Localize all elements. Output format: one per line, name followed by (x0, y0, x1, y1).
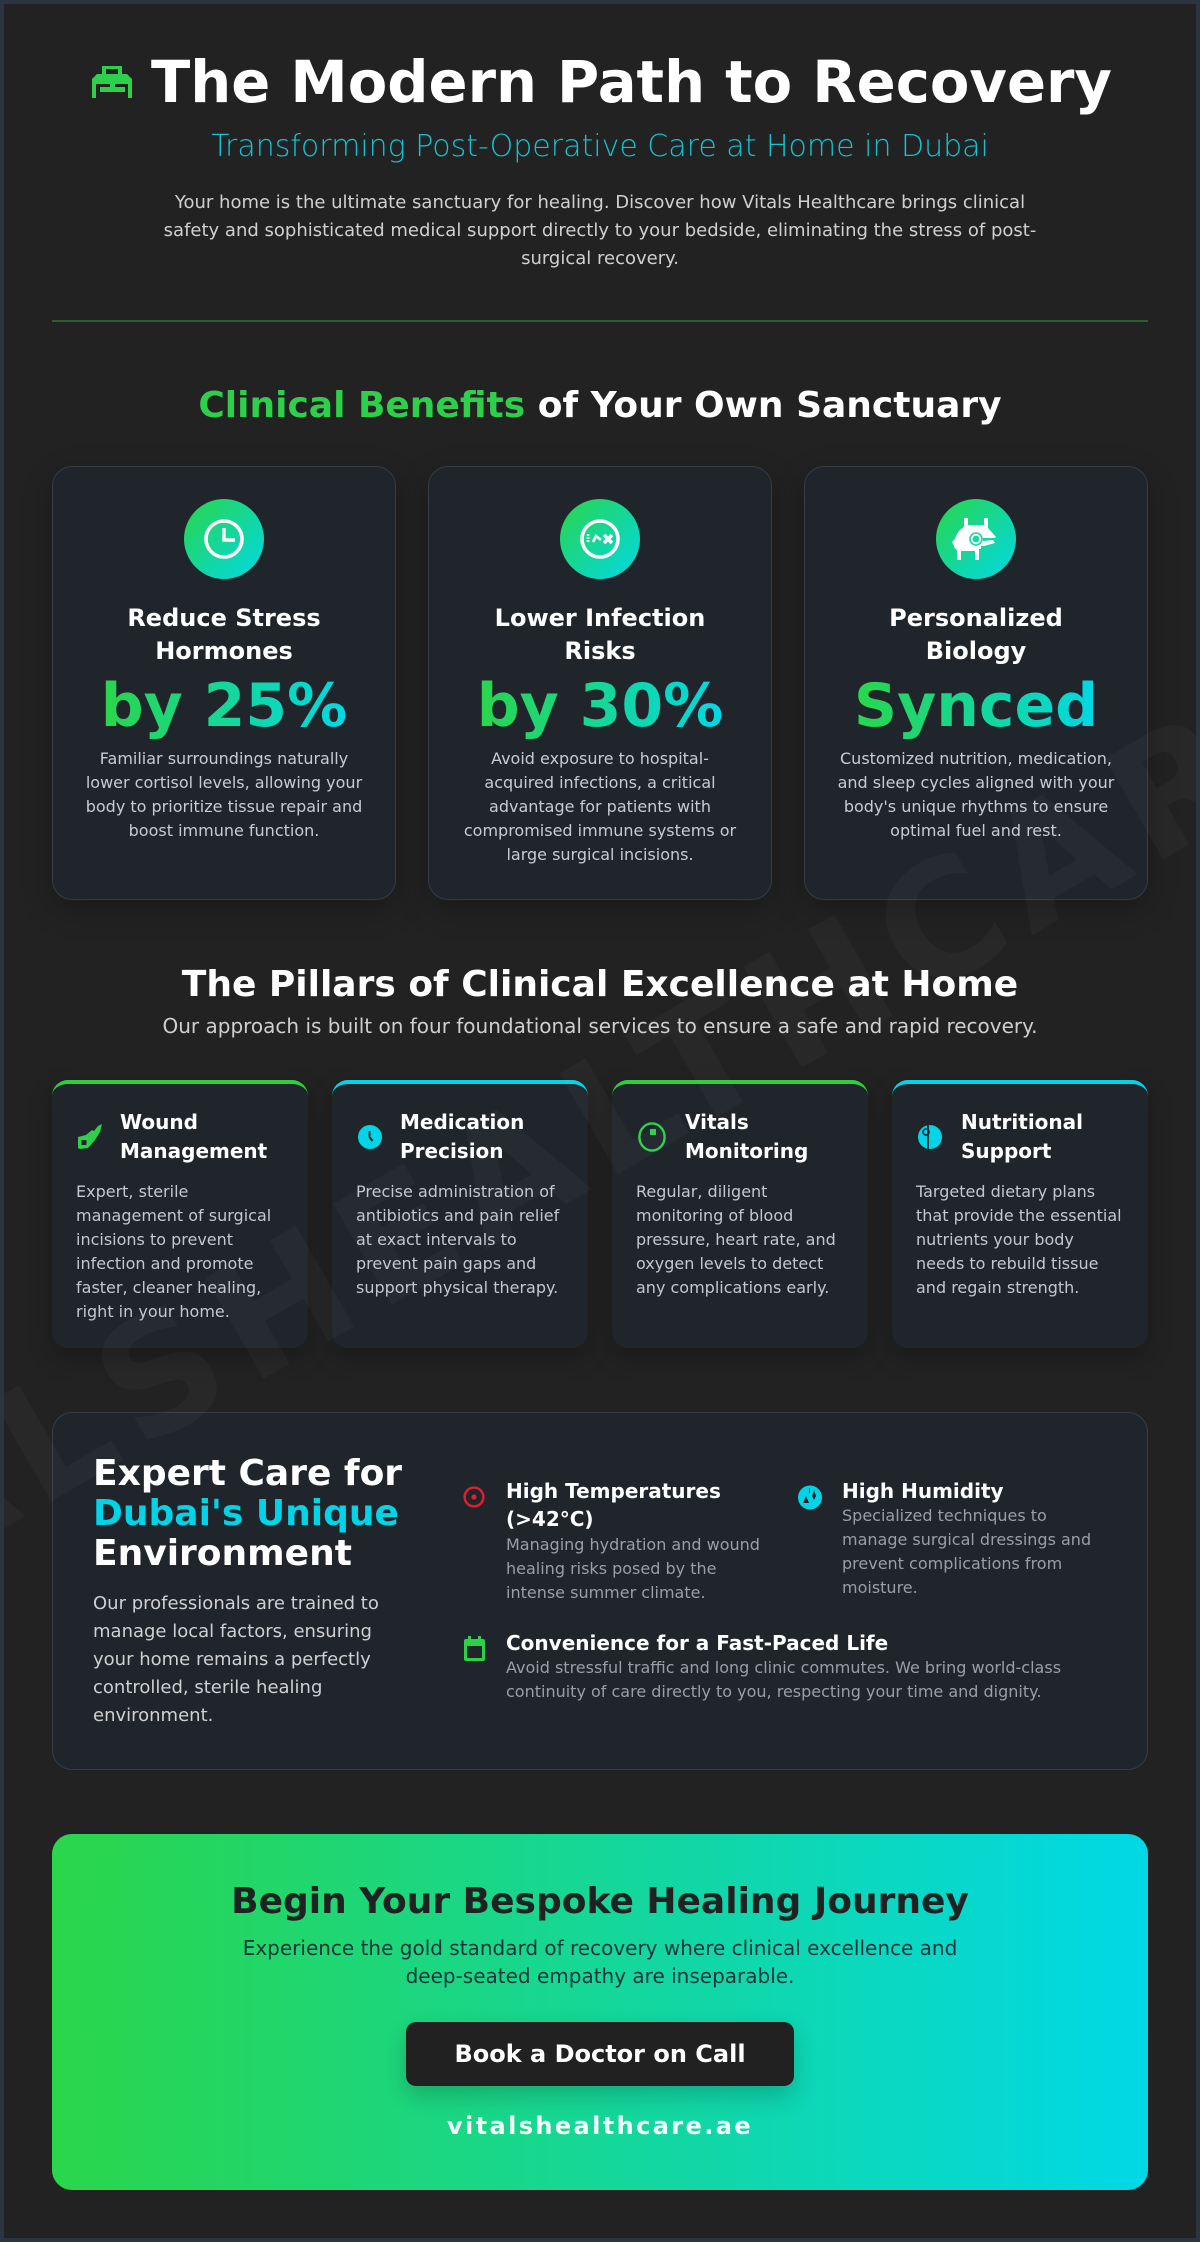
pillar text: faster, cleaner healing, (76, 1278, 261, 1297)
environment paragraph: Our professionals are trained to (93, 1593, 379, 1614)
panel: call to action (52, 1834, 1148, 2190)
pillar text: antibiotics and pain relief (356, 1206, 559, 1225)
item: high humidity (842, 1479, 1091, 1597)
card title (127, 604, 321, 665)
pillar text: Precise administration of (356, 1182, 555, 1201)
card text: Avoid exposure to hospital- (491, 749, 709, 768)
button (406, 2022, 794, 2086)
card text: body's unique rhythms to ensure (844, 797, 1108, 816)
call to action text: deep-seated empathy are inseparable. (406, 1964, 794, 1988)
card text: lower cortisol levels, allowing your (86, 773, 362, 792)
pillar title: Monitoring (685, 1138, 808, 1162)
pillar title (120, 1110, 267, 1162)
pillar text: Regular, diligent (636, 1182, 767, 1201)
item: high temperatures: (>42°C) (506, 1507, 594, 1531)
card text (838, 749, 1114, 840)
call to action text (243, 1936, 957, 1988)
stat: by 30% (477, 671, 723, 741)
pillar text: right in your home. (76, 1302, 230, 1321)
pillar text: nutrients your body (916, 1230, 1074, 1249)
pillar text: at exact intervals to (356, 1230, 517, 1249)
pillar text: and regain strength. (916, 1278, 1079, 1297)
item: high temperatures: intense summer climate. (506, 1583, 706, 1602)
pillar title: Precision (400, 1138, 504, 1162)
environment paragraph: controlled, sterile healing (93, 1677, 322, 1698)
intro paragraph: surgical recovery. (521, 248, 679, 269)
pillar text (76, 1182, 271, 1321)
card text: Familiar surroundings naturally (100, 749, 348, 768)
item: high temperatures: Managing hydration and wound (506, 1535, 760, 1554)
item: high humidity: Specialized techniques to (842, 1506, 1047, 1525)
pillar text: Expert, sterile (76, 1182, 188, 1201)
environment paragraph: your home remains a perfectly (93, 1649, 371, 1670)
pillar text: management of surgical (76, 1206, 271, 1225)
pillar text: Targeted dietary plans (916, 1182, 1095, 1201)
card title: Reduce Stress (127, 604, 321, 632)
pillar text: prevent pain gaps and (356, 1254, 536, 1273)
heading: pillars: The Pillars of Clinical Excellence at Home (182, 964, 1018, 1005)
pillar title: Management (120, 1138, 267, 1162)
heading: healing journey: Begin Your Bespoke Healing Journey (231, 1881, 969, 1922)
pillar text (636, 1182, 836, 1297)
pillar text: oxygen levels to detect (636, 1254, 823, 1273)
item: high temperatures: High Temperatures (506, 1479, 721, 1503)
icon: bandage (78, 1124, 102, 1149)
pillar text (916, 1182, 1122, 1297)
panel: wound management (52, 1080, 308, 1348)
heading: expert care: Dubai's Unique (93, 1493, 399, 1534)
pillar text: infection and promote (76, 1254, 253, 1273)
pillar title: Medication (400, 1110, 524, 1134)
item: high humidity: moisture. (842, 1578, 918, 1597)
intro paragraph: safety and sophisticated medical support directly to your bedside, eliminating the stress of post- (164, 220, 1036, 241)
intro paragraph (164, 192, 1036, 269)
pillars subheading: Our approach is built on four foundational services to ensure a safe and rapid recovery. (162, 1014, 1038, 1038)
card text: large surgical incisions. (506, 845, 694, 864)
card title: Lower Infection (495, 604, 705, 632)
environment paragraph: manage local factors, ensuring (93, 1621, 372, 1642)
item: high humidity: manage surgical dressings and (842, 1530, 1091, 1549)
button: Book a Doctor on Call (454, 2040, 746, 2068)
pillar title (961, 1110, 1083, 1162)
icon: clock (184, 499, 264, 579)
icon: shield mark (560, 499, 640, 579)
card title: Risks (564, 637, 636, 665)
pillar title: Nutritional (961, 1110, 1083, 1134)
card title: Hormones (155, 637, 293, 665)
card title (495, 604, 705, 665)
panel: vitals monitoring (612, 1080, 868, 1348)
heading: expert care: Expert Care for (93, 1453, 402, 1494)
icon: apple (918, 1125, 942, 1149)
subtitle: Transforming Post-Operative Care at Home in Dubai (211, 129, 989, 164)
stat: Synced (854, 671, 1098, 741)
item: convenience: continuity of care directly to you, respecting your time and dignity. (506, 1682, 1041, 1701)
panel: nutritional support (892, 1080, 1148, 1348)
pillar title: Support (961, 1138, 1051, 1162)
heading: expert care (93, 1453, 402, 1574)
pillar text: monitoring of blood (636, 1206, 793, 1225)
item: convenience: Convenience for a Fast-Paced Life (506, 1631, 888, 1655)
panel: medication precision (332, 1080, 588, 1348)
card text: optimal fuel and rest. (890, 821, 1062, 840)
heading: expert care: Environment (93, 1533, 352, 1574)
icon: biology (936, 499, 1016, 579)
card text: advantage for patients with (489, 797, 711, 816)
pillar text: incisions to prevent (76, 1230, 233, 1249)
intro paragraph: Your home is the ultimate sanctuary for healing. Discover how Vitals Healthcare brings clinical (175, 192, 1025, 213)
panel: personalized biology (804, 466, 1148, 900)
pillar text: that provide the essential (916, 1206, 1122, 1225)
pillar title (400, 1110, 524, 1162)
call to action text: Experience the gold standard of recovery where clinical excellence and (243, 1936, 957, 1960)
card text (464, 749, 736, 864)
card text: compromised immune systems or (464, 821, 736, 840)
card text: acquired infections, a critical (484, 773, 716, 792)
website: vitalshealthcare.ae (447, 2112, 753, 2140)
card text: Customized nutrition, medication, (840, 749, 1112, 768)
heading: clinical benefits: Clinical Benefits of Your Own Sanctuary (198, 385, 1002, 426)
pillar text: needs to rebuild tissue (916, 1254, 1098, 1273)
item: high humidity: prevent complications from (842, 1554, 1062, 1573)
pillar text: any complications early. (636, 1278, 829, 1297)
environment paragraph (93, 1593, 379, 1726)
card title (889, 604, 1063, 665)
panel: lower infection (428, 466, 772, 900)
icon: gauge (638, 1122, 666, 1152)
icon: clock (358, 1125, 382, 1149)
icon: calendar (464, 1636, 485, 1661)
pillar title: Wound (120, 1110, 198, 1134)
item: high humidity: High Humidity (842, 1479, 1004, 1503)
title: The Modern Path to Recovery (151, 49, 1112, 116)
pillar text (356, 1182, 560, 1297)
item: high temperatures: healing risks posed by the (506, 1559, 716, 1578)
stat: by 25% (101, 671, 347, 741)
item: convenience: Avoid stressful traffic and long clinic commutes. We bring world-class (506, 1658, 1061, 1677)
card text: boost immune function. (129, 821, 319, 840)
card title: Personalized (889, 604, 1063, 632)
card text (86, 749, 362, 840)
item: high temperatures (506, 1479, 760, 1602)
item: convenience (506, 1631, 1061, 1701)
panel: reduce stress (52, 466, 396, 900)
pillar text: pressure, heart rate, and (636, 1230, 836, 1249)
card text: body to prioritize tissue repair and (86, 797, 362, 816)
icon: hospital bed (92, 66, 132, 98)
icon: humidity (798, 1486, 822, 1510)
pillar text: support physical therapy. (356, 1278, 558, 1297)
pillar title (685, 1110, 808, 1162)
card text: and sleep cycles aligned with your (838, 773, 1114, 792)
card title: Biology (926, 637, 1026, 665)
environment paragraph: environment. (93, 1705, 213, 1726)
icon: temperature (463, 1486, 485, 1508)
panel: dubai environment (52, 1412, 1148, 1770)
pillar title: Vitals (685, 1110, 749, 1134)
